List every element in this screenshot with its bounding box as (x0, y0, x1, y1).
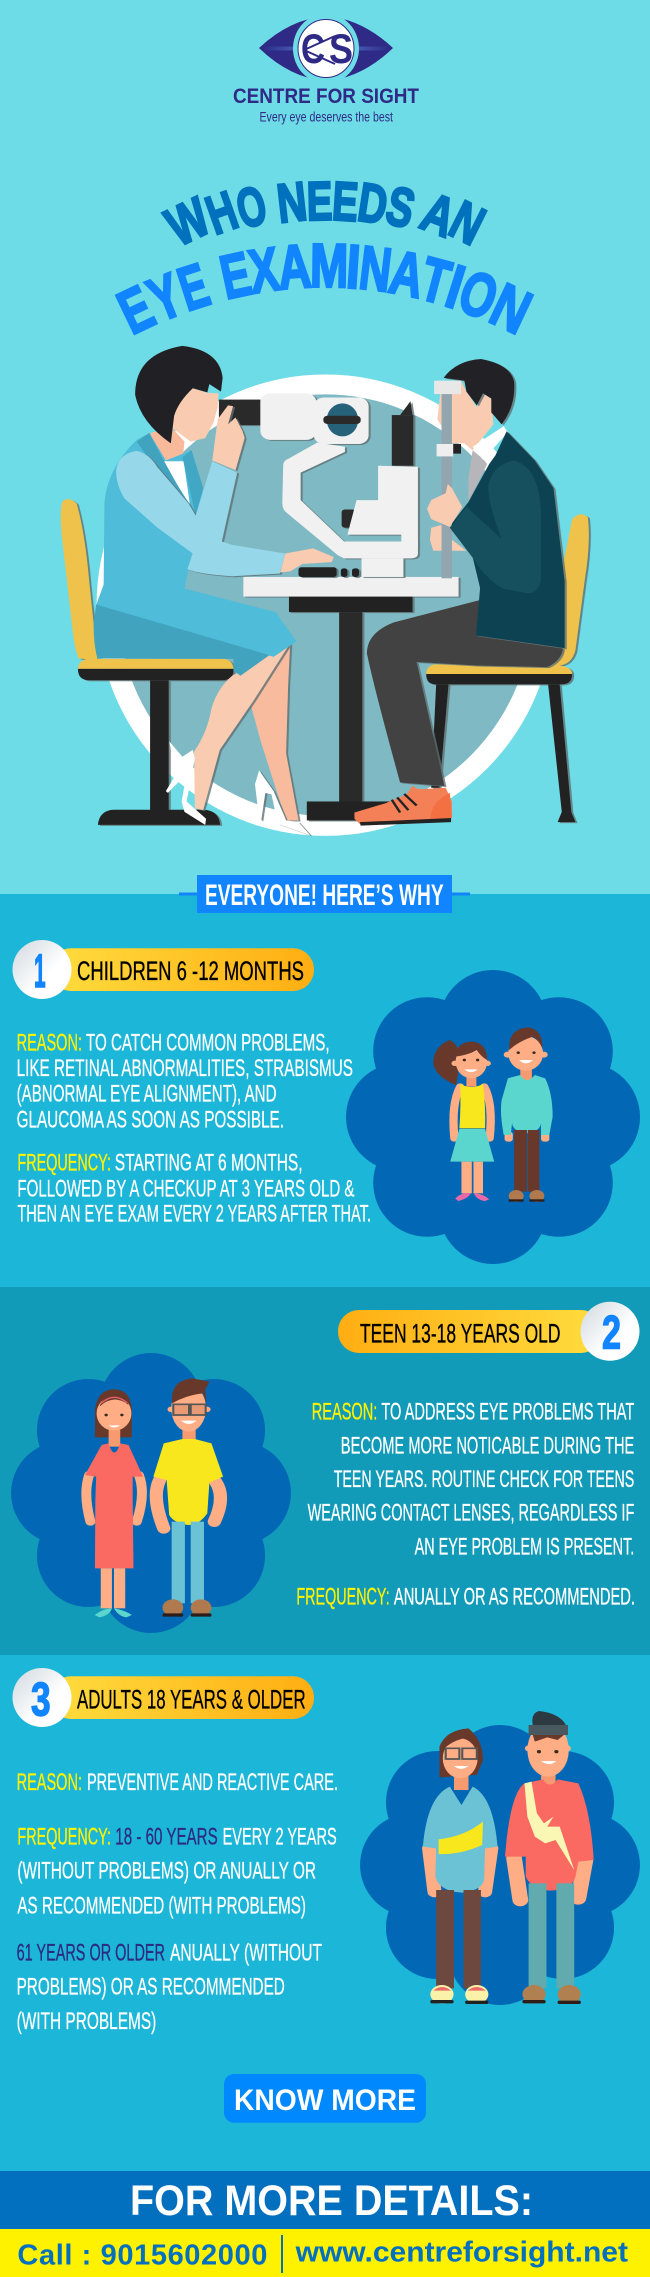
title line 2: X (244, 235, 284, 307)
title line 1: N (440, 189, 494, 257)
text: adults frequency 61+: (WITH PROBLEMS) (17, 2008, 156, 2035)
icon: eye emblem: S (329, 25, 353, 72)
footer: more details banner: FOR MORE DETAILS: (130, 2177, 533, 2225)
right chair (426, 514, 589, 822)
icon: cloud backdrop for adults (360, 1725, 640, 2005)
footer: more details banner (0, 2171, 650, 2229)
text: teen reason (308, 1398, 635, 1560)
pill heading 1: 1 (34, 944, 46, 997)
text: children frequency: THEN AN EYE EXAM EVERY 2 YEARS AFTER THAT. (17, 1201, 371, 1228)
title line 2: M (310, 231, 349, 301)
panel: header with logo, title and illustration (0, 0, 650, 894)
text: teen frequency (296, 1583, 635, 1610)
pill heading 3: 3 (31, 1672, 51, 1726)
text: children frequency (17, 1150, 371, 1228)
title line 1 (157, 171, 494, 258)
panel: children (0, 875, 650, 1287)
pill heading 3: ADULTS 18 YEARS & OLDER (77, 1684, 306, 1714)
text: adults frequency 61+: ANUALLY (WITHOUT (170, 1940, 322, 1967)
title line 2: E (214, 240, 257, 313)
title line 2: E (170, 250, 217, 325)
title line 2: I (438, 251, 473, 322)
pill heading 1 (12, 940, 314, 999)
title line 2: O (450, 257, 507, 334)
text: teen reason: REASON: (312, 1398, 377, 1425)
illustration: optometrist examining patient (61, 346, 589, 836)
illustration: girl and boy (433, 1027, 553, 1202)
logo name: CENTRE FOR SIGHT (233, 85, 419, 108)
text: adults reason: REASON: (17, 1769, 82, 1796)
text: adults frequency 61+: 61 YEARS OR OLDER (17, 1940, 165, 1967)
text: adults frequency 18-60: (WITHOUT PROBLEMS) OR ANUALLY OR (17, 1857, 316, 1884)
text: children frequency: STARTING AT 6 MONTHS, (115, 1150, 303, 1177)
title line 2 (108, 231, 542, 348)
title line 1: S (380, 175, 420, 241)
text: adults frequency 18-60: 18 - 60 YEARS (115, 1823, 218, 1850)
pill heading 3 (12, 1668, 314, 1727)
title line 2: T (413, 245, 457, 318)
title line 1: E (306, 171, 333, 233)
text: teen frequency: FREQUENCY: (296, 1583, 390, 1610)
text: children frequency: FREQUENCY: (17, 1150, 111, 1177)
text: adults frequency 61+ (17, 1940, 322, 2035)
icon: cloud backdrop for teens (11, 1353, 291, 1633)
illustration: teen girl and boy (85, 1378, 223, 1617)
woman doctor (94, 346, 334, 835)
backdrop circle (97, 374, 554, 836)
text: children reason: TO CATCH COMMON PROBLEMS, (86, 1030, 330, 1057)
title line 1: E (330, 171, 360, 234)
heading: everyone here's why (179, 875, 470, 913)
footer: contact bar: Call : 9015602000 (17, 2239, 267, 2271)
title line 1: H (199, 180, 245, 247)
text: children reason: REASON: (17, 1030, 82, 1057)
icon: eye emblem (259, 14, 393, 84)
title line 1: N (274, 171, 310, 235)
title line 2: I (344, 231, 363, 302)
logo: Centre for Sight (233, 14, 419, 124)
man patient (354, 359, 565, 826)
footer: contact bar (0, 2229, 650, 2277)
text: adults reason: PREVENTIVE AND REACTIVE CARE. (87, 1769, 338, 1796)
text: children frequency: FOLLOWED BY A CHECKUP AT 3 YEARS OLD & (17, 1176, 355, 1203)
text: children reason: GLAUCOMA AS SOON AS POSSIBLE. (17, 1107, 284, 1134)
title line 2: A (384, 237, 430, 311)
panel: adults (0, 1655, 650, 2171)
text: adults frequency 18-60: FREQUENCY: (17, 1823, 111, 1850)
button: know more: KNOW MORE (234, 2084, 416, 2117)
button: know more (224, 2074, 426, 2123)
text: adults frequency 18-60: AS RECOMMENDED (WITH PROBLEMS) (17, 1892, 306, 1919)
heading: everyone here's why: EVERYONE! HERE’S WHY (205, 879, 444, 912)
pill heading 1: CHILDREN 6 -12 MONTHS (77, 956, 304, 986)
icon: cloud backdrop for children (346, 970, 640, 1264)
text: adults reason (17, 1769, 338, 1796)
text: children reason: (ABNORMAL EYE ALIGNMENT), AND (17, 1081, 276, 1108)
text: children reason (17, 1030, 353, 1134)
title line 1: W (157, 186, 220, 258)
text: adults frequency 18-60 (17, 1823, 337, 1919)
title line 2: Y (139, 260, 192, 335)
logo tagline: Every eye deserves the best (260, 110, 393, 124)
text: adults frequency 61+: PROBLEMS) OR AS RECOMMENDED (17, 1973, 285, 2000)
pill heading 2: 2 (602, 1306, 621, 1358)
title line 2: E (108, 273, 164, 348)
title line 1: A (413, 181, 464, 249)
text: children reason: LIKE RETINAL ABNORMALITIES, STRABISMUS (17, 1055, 353, 1082)
title line 1: O (230, 174, 273, 240)
icon: eye emblem: C (301, 25, 325, 72)
text: adults frequency 18-60: EVERY 2 YEARS (223, 1823, 337, 1850)
slit lamp machine (219, 393, 418, 577)
title line 2: A (275, 231, 313, 303)
chin rest (434, 381, 461, 578)
title line 2: N (481, 270, 542, 347)
footer: contact bar: www.centreforsight.net (295, 2237, 628, 2269)
panel: teen (0, 1287, 650, 1655)
left chair (61, 499, 233, 825)
title line 1: D (354, 172, 391, 237)
table (243, 577, 459, 820)
illustration: adult woman and man (423, 1711, 594, 2004)
pill heading 2 (338, 1302, 640, 1361)
title line 2: N (356, 234, 395, 306)
